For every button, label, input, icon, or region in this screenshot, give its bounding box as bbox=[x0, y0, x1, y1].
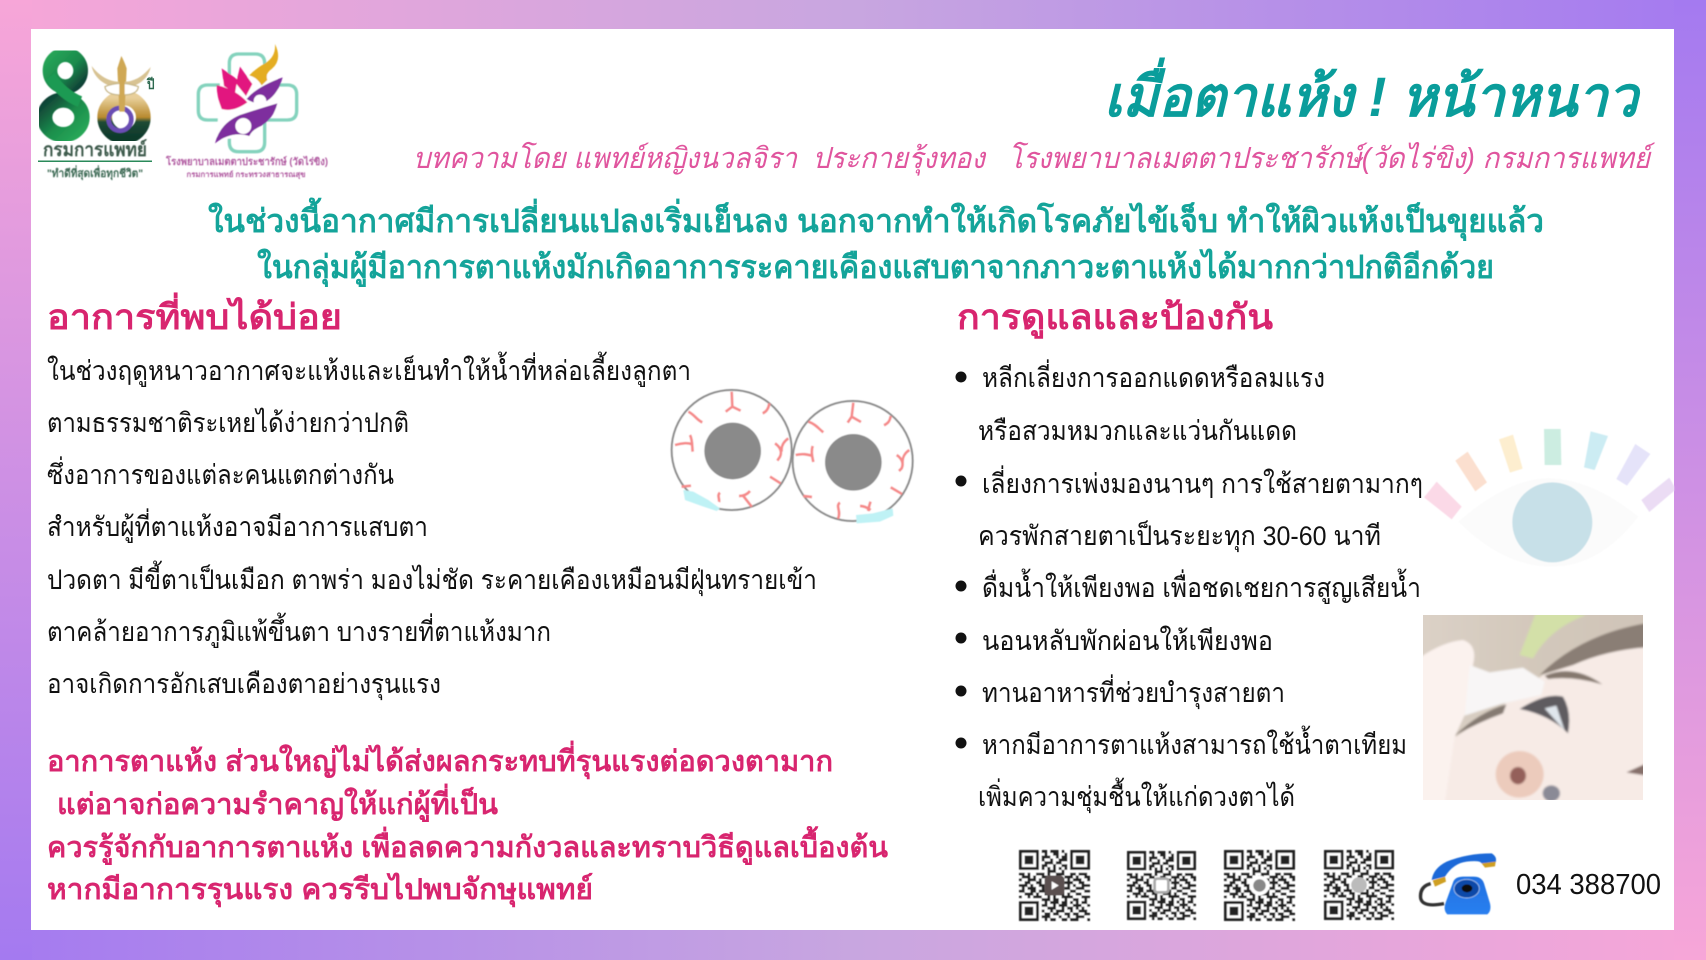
backdrop bbox=[1423, 615, 1643, 737]
care list: หรือสวมหมวกและแว่นกันแดด bbox=[978, 416, 1297, 446]
hair bbox=[1540, 622, 1643, 676]
symptoms text block bbox=[47, 351, 817, 701]
symptoms text block: ในช่วงฤดูหนาวอากาศจะแห้งและเย็นทำให้น้ำที่หล่อเลี้ยงลูกตา bbox=[47, 351, 691, 387]
symptoms text block: อาจเกิดการอักเสบเคืองตาอย่างรุนแรง bbox=[47, 669, 441, 701]
eye shape bbox=[1458, 478, 1638, 567]
label: department name: กรมการแพทย์ bbox=[43, 139, 147, 161]
symptoms text block: ซึ่งอาการของแต่ละคนแตกต่างกัน bbox=[47, 456, 394, 490]
icon: blue rotary telephone bbox=[1421, 853, 1496, 914]
figure zero bbox=[105, 98, 143, 137]
caduceus bbox=[92, 56, 151, 112]
eye highlight bbox=[1545, 706, 1565, 731]
QR code: Facebook bbox=[1224, 850, 1295, 921]
hospital name: โรงพยาบาลเมตตาประชารักษ์ (วัดไร่ขิง) bbox=[165, 155, 328, 168]
intro text bbox=[208, 197, 1544, 288]
QR codes bbox=[1019, 850, 1394, 921]
figure eight bbox=[45, 55, 82, 135]
shadow below bottle bbox=[1455, 704, 1506, 736]
colored rays bbox=[1424, 429, 1676, 519]
care list: เลี่ยงการเพ่งมองนานๆ การใช้สายตามากๆ bbox=[982, 465, 1423, 499]
background icon: faded eye with rays bbox=[1424, 429, 1676, 567]
photo: applying eye drops bbox=[1423, 615, 1643, 800]
symptoms text block: ตาคล้ายอาการภูมิแพ้ขึ้นตา บางรายที่ตาแห้งมาก bbox=[47, 612, 551, 648]
logo rule bbox=[38, 160, 152, 162]
care list: นอนหลับพักผ่อนให้เพียงพอ bbox=[982, 625, 1273, 656]
warning text block: ควรรู้จักกับอาการตาแห้ง เพื่อลดความกังวลและทราบวิธีดูแลเบื้องต้น bbox=[47, 825, 888, 865]
hand bbox=[1423, 639, 1476, 738]
upper purple figure bbox=[247, 77, 283, 103]
icon: dry red eyes bbox=[672, 390, 913, 523]
care list bbox=[956, 359, 1423, 814]
care list: ทานอาหารที่ช่วยบำรุงสายตา bbox=[982, 674, 1285, 710]
phone number: 034 388700 bbox=[1516, 869, 1661, 901]
symptoms text block: ตามธรรมชาติระเหยได้ง่ายกว่าปกติ bbox=[47, 408, 409, 438]
skin base bbox=[1445, 648, 1643, 800]
QR code: website bbox=[1324, 850, 1394, 920]
telephone body bbox=[1445, 877, 1490, 914]
bullet points bbox=[956, 372, 966, 748]
symptoms text block: สำหรับผู้ที่ตาแห้งอาจมีอาการแสบตา bbox=[47, 508, 428, 543]
warning text block: อาการตาแห้ง ส่วนใหญ่ไม่ได้ส่งผลกระทบที่รุนแรงต่อดวงตามาก bbox=[47, 740, 833, 779]
warning text block: หากมีอาการรุนแรง ควรรีบไปพบจักษุแพทย์ bbox=[47, 872, 593, 907]
nose and nostrils bbox=[1496, 751, 1544, 798]
handset bbox=[1432, 853, 1496, 880]
byline: บทความโดย แพทย์หญิงนวลจิรา ประกายรุ้งทอง โรงพยาบาลเมตตาประชารักษ์(วัดไร่ขิง) กรมการแพทย์ bbox=[413, 141, 1656, 176]
bottle bbox=[1465, 665, 1545, 716]
left eye bbox=[672, 390, 792, 511]
eye bbox=[1520, 696, 1569, 733]
heading: common symptoms: อาการที่พบได้บ่อย bbox=[47, 292, 342, 337]
care list: หลีกเลี่ยงการออกแดดหรือลมแรง bbox=[982, 359, 1325, 393]
eyebrow bbox=[1545, 671, 1602, 684]
gold flame bbox=[249, 44, 278, 85]
lower purple figure bbox=[215, 103, 277, 143]
heading: care and prevention: การดูแลและป้องกัน bbox=[957, 298, 1273, 339]
warning text block bbox=[47, 740, 888, 907]
care list: หากมีอาการตาแห้งสามารถใช้น้ำตาเทียม bbox=[982, 725, 1407, 760]
intro text: ในกลุ่มผู้มีอาการตาแห้งมักเกิดอาการระคายเคืองแสบตาจากภาวะตาแห้งได้มากกว่าปกติอีกด้วย bbox=[257, 248, 1494, 288]
cord bbox=[1421, 884, 1444, 905]
logo: Department of Medical Services 80 years bbox=[38, 55, 155, 181]
number 80 emblem bbox=[45, 55, 151, 137]
lower figure head bbox=[235, 118, 251, 134]
care list: เพิ่มความชุ่มชื้นให้แก่ดวงตาได้ bbox=[978, 777, 1295, 814]
right eye bbox=[793, 401, 913, 523]
handset gold ends bbox=[1433, 862, 1496, 887]
QR code: Line bbox=[1127, 851, 1196, 920]
hospital emblem bbox=[198, 44, 297, 152]
dial bbox=[1454, 879, 1479, 898]
symptoms text block: ปวดตา มีขี้ตาเป็นเมือก ตาพร่า มองไม่ชัด ระคายเคืองเหมือนมีฝุ่นทรายเข้า bbox=[47, 560, 817, 597]
white knockout behind figures bbox=[217, 73, 280, 140]
far eye bbox=[1626, 764, 1643, 776]
teal cross outline bbox=[198, 54, 297, 152]
title: เมื่อตาแห้ง ! หน้าหนาว bbox=[1104, 57, 1641, 128]
upper figure head bbox=[254, 95, 266, 107]
care list: ดื่มน้ำให้เพียงพอ เพื่อชดเชยการสูญเสียน้ำ bbox=[982, 568, 1421, 604]
ministry name: กรมการแพทย์ กระทรวงสาธารณสุข bbox=[186, 170, 306, 179]
iris bbox=[1512, 482, 1592, 562]
slogan: "ทำดีที่สุดเพื่อทุกชีวิต" bbox=[47, 165, 143, 181]
green foliage bbox=[1520, 612, 1586, 658]
magenta petals bbox=[217, 67, 252, 110]
label: years: ปี bbox=[146, 76, 155, 92]
intro text: ในช่วงนี้อากาศมีการเปลี่ยนแปลงเริ่มเย็นลง นอกจากทำให้เกิดโรคภัยไข้เจ็บ ทำให้ผิวแห้งเป็นขุยแล้ว bbox=[208, 197, 1544, 242]
QR code: YouTube bbox=[1019, 850, 1090, 921]
logo: Metta Pracharak hospital bbox=[165, 44, 328, 179]
warning text block: แต่อาจก่อความรำคาญให้แก่ผู้ที่เป็น bbox=[57, 783, 498, 822]
care list: ควรพักสายตาเป็นระยะทุก 30-60 นาที bbox=[978, 518, 1381, 553]
